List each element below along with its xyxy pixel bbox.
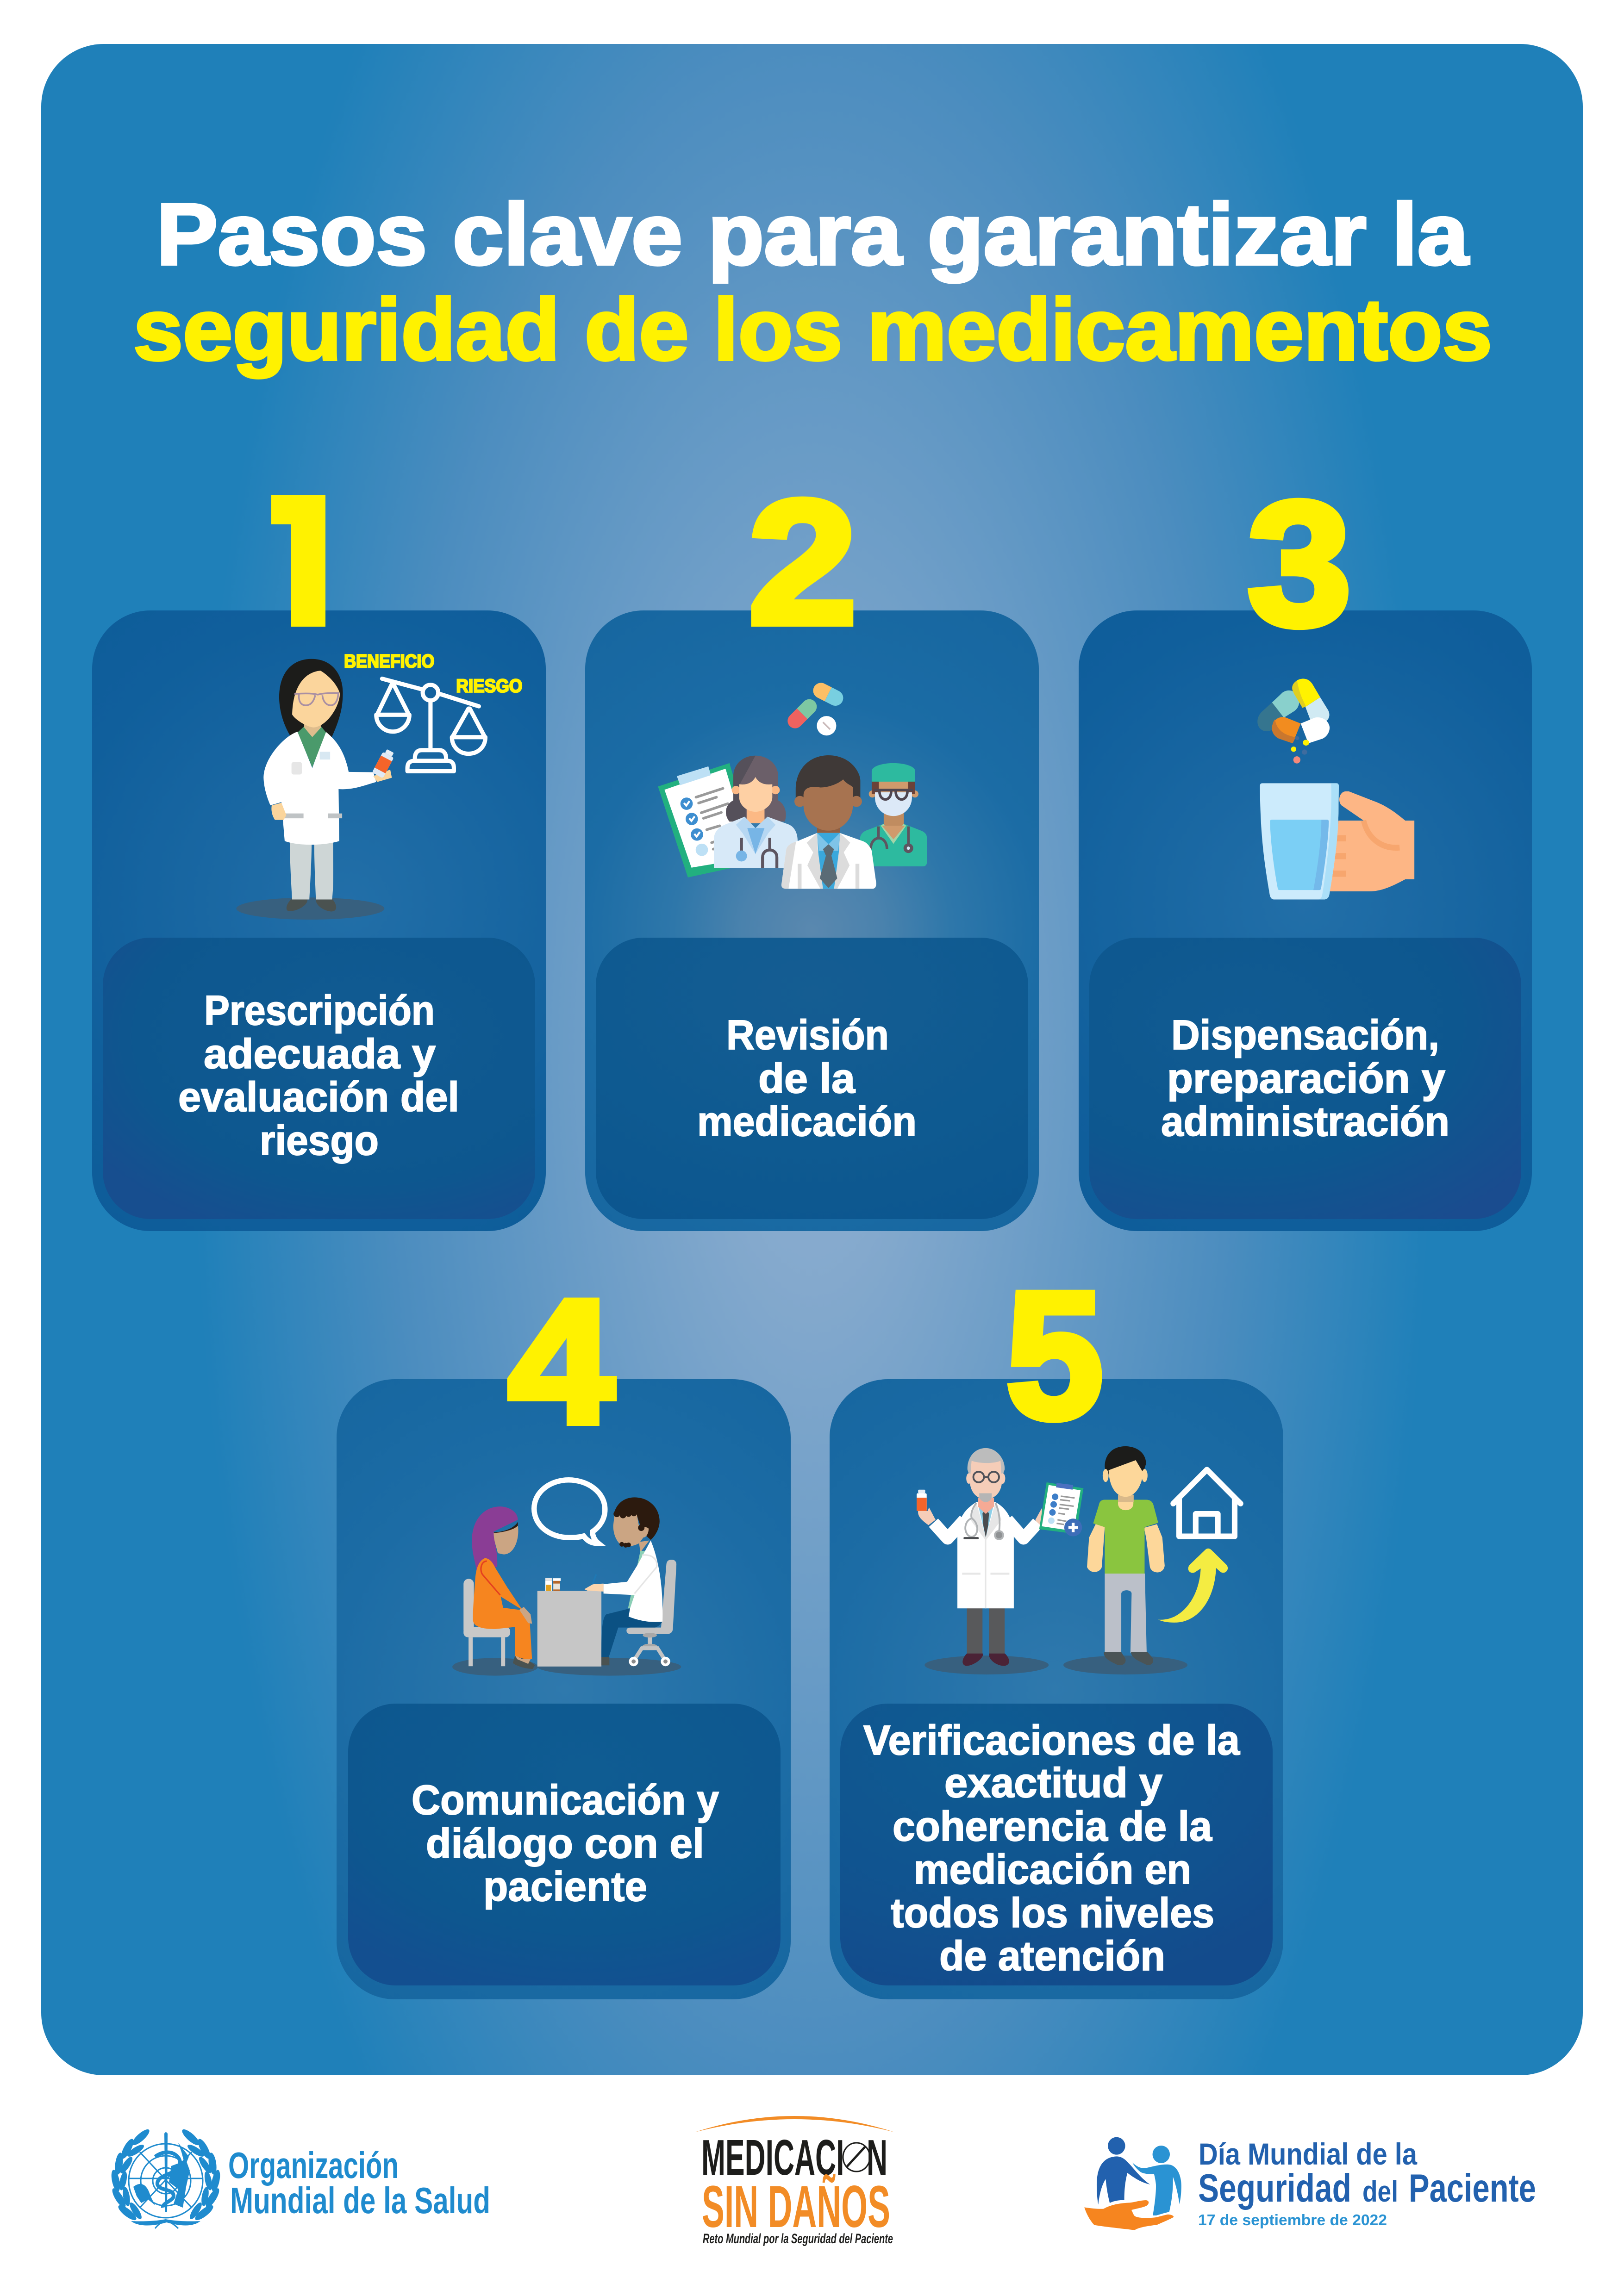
logo date: 17 de septiembre de 2022: [1198, 2211, 1387, 2228]
icon: male doctor: [781, 755, 876, 889]
card body 3: [1079, 610, 1532, 1231]
label text 1: Prescripción: [204, 988, 435, 1034]
icon: prescriber with balance scale: [236, 651, 522, 920]
logo: Medicación sin daños: [695, 2116, 894, 2246]
panel: step 3: [1079, 465, 1532, 1231]
logo text: Organización Mundial de la Salud: Mundial de la Salud: [230, 2180, 490, 2221]
icon: health worker chair: [626, 1560, 676, 1666]
icon: doctor handing over to a patient going home: [917, 1446, 1241, 1674]
panel: step 2: [585, 464, 1039, 1231]
label text 3: preparación y: [1167, 1056, 1445, 1102]
icon: water glass: [1260, 783, 1339, 900]
label text 1: riesgo: [260, 1118, 379, 1164]
icon: clipboard with plus: [1039, 1482, 1083, 1537]
number 2: 2: [749, 464, 857, 660]
label text 2: de la: [758, 1056, 856, 1102]
label text 5: todos los niveles: [891, 1890, 1214, 1936]
card body 4: [337, 1379, 791, 1999]
logo text: Seguridad del Paciente: Seguridad: [1198, 2166, 1351, 2210]
icon: people and hand: [1084, 2137, 1181, 2230]
icon: patient and health worker talking across a desk: [452, 1480, 681, 1676]
label text 3: [1161, 1012, 1449, 1145]
label text 4: [412, 1777, 719, 1910]
icon: house: [1173, 1469, 1241, 1537]
card body 2: [585, 610, 1039, 1231]
label text 5: medicación en: [914, 1847, 1191, 1893]
panel: step 5: [830, 1255, 1283, 1999]
icon: speech bubble: [534, 1480, 605, 1543]
panel: step 1: [92, 459, 546, 1231]
icon: balance scale: [376, 678, 485, 771]
icon: tablet as letter O: [843, 2143, 870, 2172]
icon: orange arc: [695, 2116, 894, 2132]
icon: patient: [1087, 1446, 1165, 1665]
number 4: 4: [508, 1263, 615, 1460]
label box 4: [348, 1704, 781, 1985]
label text 4: Comunicación y: [412, 1777, 719, 1823]
label text 4: diálogo con el: [426, 1821, 704, 1867]
logo text: Día Mundial de la: Día Mundial de la: [1199, 2137, 1418, 2171]
logo: World Patient Safety Day: [1084, 2137, 1536, 2230]
logo text: Seguridad del Paciente: [1198, 2166, 1536, 2210]
title line 2: seguridad de los medicamentos: [133, 281, 1492, 378]
label text 1: adecuada y: [204, 1031, 436, 1077]
label text 3: Dispensación,: [1171, 1012, 1439, 1058]
number 3: 3: [1248, 465, 1351, 662]
label text 2: Revisión: [726, 1012, 889, 1058]
icon: hand: [1330, 791, 1414, 891]
icon: desk with medicine bottles: [537, 1578, 601, 1667]
icon: woman doctor: [714, 756, 798, 868]
icon: WHO emblem: [110, 2127, 222, 2228]
label text 5: coherencia de la: [893, 1804, 1212, 1850]
icon: health team with pills and checklist: [658, 680, 927, 889]
logo text: Seguridad del Paciente: del: [1362, 2175, 1398, 2208]
label: riesgo: RIESGO: [456, 676, 522, 696]
label box 3: [1089, 938, 1521, 1219]
label text 1: evaluación del: [178, 1074, 459, 1120]
title line 1: Pasos clave para garantizar la: [156, 186, 1469, 283]
logo text: Organización Mundial de la Salud: Organización: [228, 2145, 399, 2186]
icon: patient chair: [463, 1579, 510, 1666]
icon: doctor: [917, 1448, 1043, 1666]
label text 5: Verificaciones de la: [863, 1717, 1240, 1764]
card body 1: [92, 610, 546, 1231]
label text 5: [863, 1717, 1240, 1979]
logo tagline: Reto Mundial por la Seguridad del Paciente: [703, 2231, 893, 2246]
title: [133, 186, 1492, 378]
label text 1: [178, 988, 459, 1164]
label: beneficio: BENEFICIO: [344, 651, 434, 672]
label text 5: exactitud y: [944, 1760, 1162, 1806]
logo: World Health Organization: [110, 2127, 490, 2228]
icon: patient: [472, 1506, 535, 1669]
label text 3: administración: [1161, 1099, 1449, 1145]
arrow: going home: [1158, 1549, 1228, 1623]
icon: health worker: [584, 1497, 662, 1665]
icon: clipboard checklist: [658, 763, 759, 877]
icon: pills: [785, 680, 846, 735]
label box 2: [596, 938, 1028, 1219]
label box 1: [103, 938, 535, 1219]
panel: step 4: [337, 1263, 791, 1999]
logo text: Organización Mundial de la Salud: [228, 2145, 490, 2221]
logo text: Sin daños: SIN DAÑOS: [702, 2174, 890, 2240]
label text 5: de atención: [939, 1933, 1165, 1979]
card body 5: [830, 1379, 1283, 1999]
label text 2: [697, 1012, 917, 1145]
logo text: Seguridad del Paciente: Paciente: [1409, 2166, 1536, 2210]
icon: pills dropping into a glass held by a hand: [1257, 678, 1414, 900]
icon: surgeon: [860, 763, 927, 866]
icon: capsules: [1257, 678, 1330, 764]
number 1: 1: [251, 459, 360, 666]
logo text: Medicación: MEDICACIÓN: [701, 2129, 887, 2186]
label box 5: [840, 1704, 1273, 1985]
number 5: 5: [1006, 1255, 1103, 1456]
label text 4: paciente: [483, 1864, 647, 1910]
label text 2: medicación: [697, 1099, 917, 1145]
